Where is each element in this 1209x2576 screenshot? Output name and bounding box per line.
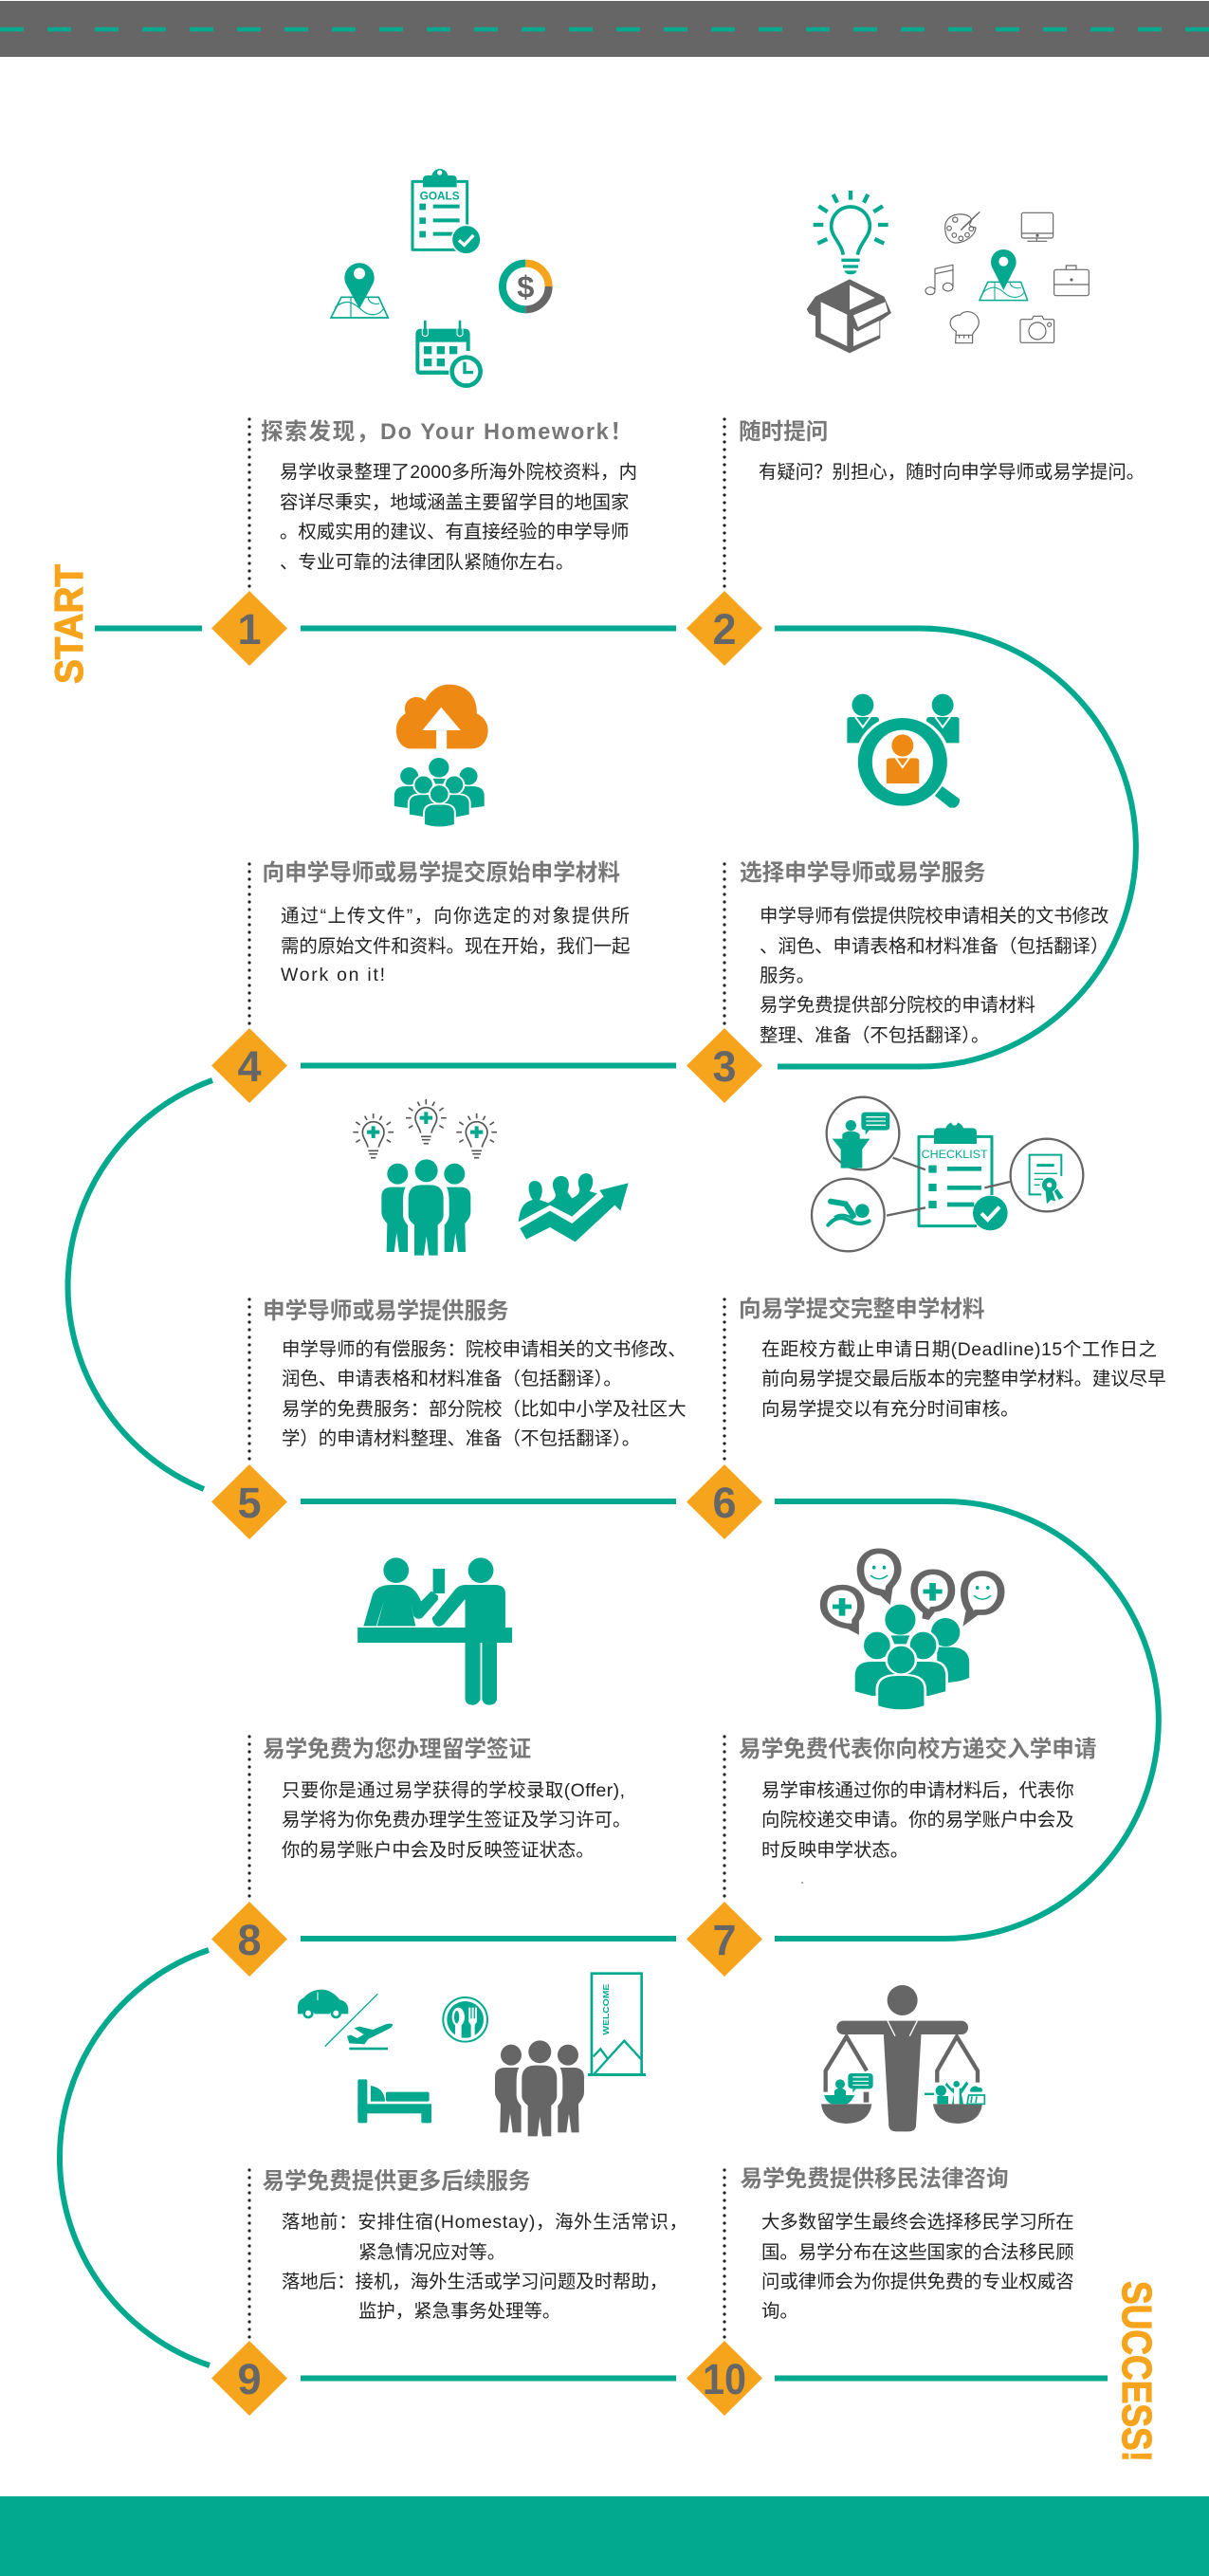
body: step 6 (761, 1339, 1166, 1420)
body: step 3: 易学免费提供部分院校的申请材料 (760, 995, 1035, 1016)
step marker 1 (211, 591, 287, 666)
body: step 9: 落地前：安排住宿(Homestay)，海外生活常识， (282, 2212, 687, 2233)
heading: step 4: 向申学导师或易学提交原始申学材料 (262, 859, 620, 886)
step marker 10: 10 (703, 2355, 746, 2403)
SUCCESS label: SUCCESS! (1113, 2281, 1160, 2462)
icon: crowd (853, 1605, 969, 1710)
body: step 10: 询。 (761, 2301, 798, 2322)
panel: step 2 text (724, 419, 1145, 590)
step marker 4: 4 (237, 1042, 262, 1091)
body: step 8: 你的易学账户中会及时反映签证状态。 (282, 1840, 595, 1861)
icon: monitor (1021, 212, 1053, 241)
panel: step 6 text (724, 1296, 1166, 1460)
icon: crowd of students (394, 758, 485, 827)
icon group: choose a mentor (847, 694, 960, 808)
icon: certificate circle (1011, 1139, 1083, 1211)
panel: step 10 text (724, 2166, 1074, 2340)
icon: person as scales (821, 1985, 982, 2131)
icon: upload cloud (396, 685, 488, 749)
body: step 3: 申学导师有偿提供院校申请相关的文书修改 (760, 906, 1108, 927)
step marker 1: 1 (237, 605, 262, 653)
bottom band (0, 2496, 1209, 2576)
body: step 9: 监护，紧急事务处理等。 (358, 2301, 560, 2322)
icon: map pin (331, 263, 388, 318)
step marker 7 (687, 1902, 762, 1977)
icon: welcome banner (588, 1974, 646, 2076)
step marker 5: 5 (237, 1479, 262, 1527)
icon: team of three (381, 1159, 470, 1256)
winding path (60, 628, 1159, 2379)
icon group: visa service (357, 1557, 512, 1705)
body: step 10: 大多数留学生最终会选择移民学习所在 (761, 2212, 1074, 2233)
body: step 3: 服务。 (760, 966, 815, 986)
icon: goals clipboard: GOALS (420, 190, 460, 203)
panel: step 5 text (249, 1298, 687, 1460)
panel: step 1 text (249, 419, 637, 590)
body: step 9 (282, 2212, 687, 2322)
body: step 5 (282, 1339, 687, 1449)
body: step 3: 整理、准备（不包括翻译）。 (760, 1025, 989, 1046)
icon group: submit application (824, 1551, 1001, 1710)
road banner (0, 1, 1209, 57)
icon: briefcase (1054, 266, 1089, 296)
step marker 4 (211, 1028, 287, 1103)
body: step 9: 紧急情况应对等。 (358, 2242, 505, 2263)
body: step 4: 通过“上传文件”，向你选定的对象提供所 (281, 906, 630, 927)
body: step 2: 有疑问？别担心，随时向申学导师或易学提问。 (759, 462, 1145, 483)
body: step 6: 向易学提交以有充分时间审核。 (761, 1399, 1018, 1420)
icon: magnifier with mentors (847, 694, 960, 808)
body: step 8 (282, 1780, 631, 1861)
body: step 4 (281, 906, 630, 985)
icon: three idea bulbs (353, 1099, 497, 1158)
step marker 5 (211, 1464, 287, 1539)
body: step 5: 申学导师的有偿服务：院校申请相关的文书修改、 (282, 1339, 687, 1360)
body: step 10 (761, 2212, 1074, 2322)
START label: START (46, 564, 91, 684)
body: step 4: 需的原始文件和资料。现在开始，我们一起 (281, 936, 630, 957)
icon: dining plate (443, 1997, 487, 2042)
icon: welcome banner: WELCOME (601, 1983, 611, 2035)
step marker 3 (687, 1028, 762, 1103)
panel: step 4 text (249, 859, 630, 1026)
body: step 1: 容详尽秉实，地域涵盖主要留学目的地国家 (280, 492, 629, 513)
body: step 1: 易学收录整理了2000多所海外院校资料，内 (280, 462, 637, 483)
icon: speaker circle (827, 1097, 899, 1169)
body: step 7: 易学审核通过你的申请材料后，代表你 (761, 1780, 1074, 1801)
icon group: idea bulb, box, interests (807, 191, 1089, 353)
icon group: legal advice scale (821, 1985, 984, 2131)
icon: checklist clipboard (919, 1119, 1008, 1230)
body: step 5: 学）的申请材料整理、准备（不包括翻译）。 (282, 1428, 640, 1449)
panel: step 9 text (249, 2168, 687, 2340)
icon: music note (925, 265, 953, 295)
step marker 6 (687, 1464, 762, 1539)
icon: feedback bubbles (824, 1551, 1001, 1629)
icon: bubble symbols (833, 1566, 991, 1616)
icon group: mentor service (353, 1099, 629, 1256)
heading: step 10: 易学免费提供移民法律咨询 (740, 2166, 1009, 2192)
icon: camera (1020, 316, 1054, 342)
icon: car and plane (298, 1990, 393, 2050)
icon: chef hat (950, 312, 979, 343)
body: step 5: 易学的免费服务：部分院校（比如中小学及社区大 (282, 1399, 687, 1420)
body: step 4: Work on it! (281, 965, 385, 985)
icon: budget ring: $ (517, 269, 534, 304)
icon: goals clipboard (412, 169, 481, 254)
step marker 6: 6 (712, 1479, 737, 1527)
panel: step 8 text (249, 1737, 631, 1900)
icon group: goals, map pin, budget, calendar (331, 169, 549, 386)
icon group: complete checklist (812, 1097, 1083, 1251)
icon: budget ring (503, 264, 549, 309)
heading: step 8: 易学免费为您办理留学签证 (263, 1737, 531, 1762)
icon: growth arrow with people (519, 1173, 629, 1242)
icon: scale contents (824, 2073, 984, 2104)
body: step 6: 前向易学提交最后版本的完整申学材料。建议尽早 (761, 1369, 1166, 1389)
heading: step 2: 随时提问 (739, 419, 828, 445)
body: step 1: 。权威实用的建议、有直接经验的申学导师 (280, 522, 629, 543)
body: step 3: 、润色、申请表格和材料准备（包括翻译） (760, 936, 1108, 957)
step marker 2 (687, 591, 762, 666)
heading: step 7: 易学免费代表你向校方递交入学申请 (739, 1736, 1096, 1762)
step marker 3: 3 (712, 1042, 737, 1091)
step marker 9 (211, 2341, 287, 2416)
icon: visa counter (357, 1557, 512, 1705)
body: step 7 (761, 1780, 1074, 1884)
body: step 5: 润色、申请表格和材料准备（包括翻译）。 (282, 1369, 622, 1389)
icon: calendar with clock (415, 322, 481, 386)
body: step 6: 在距校方截止申请日期(Deadline)15个工作日之 (761, 1339, 1157, 1360)
body: step 7: 向院校递交申请。你的易学账户中会及 (761, 1810, 1074, 1831)
heading: step 6: 向易学提交完整申学材料 (739, 1296, 985, 1322)
icon: bed (357, 2079, 431, 2123)
icon group: after-arrival services (298, 1974, 646, 2136)
panel: step 7 text (724, 1736, 1096, 1900)
heading: step 9: 易学免费提供更多后续服务 (262, 2168, 531, 2195)
icon: checklist clipboard: CHECKLIST (922, 1148, 988, 1161)
step marker 7: 7 (712, 1916, 737, 1964)
body: step 10: 问或律师会为你提供免费的专业权威咨 (761, 2272, 1074, 2292)
icon: swimmer circle (812, 1179, 885, 1251)
icon group: upload materials (394, 685, 488, 827)
step marker 8 (211, 1902, 287, 1977)
body: step 7: 时反映申学状态。 (761, 1840, 908, 1861)
step marker 9: 9 (237, 2355, 262, 2403)
icon: group of three (495, 2040, 584, 2136)
step marker 8: 8 (237, 1916, 262, 1964)
icon: palette (945, 212, 980, 243)
heading: step 3: 选择申学导师或易学服务 (740, 860, 986, 886)
heading: step 1: 探索发现，Do Your Homework！ (261, 419, 632, 445)
body: step 9: 落地后：接机，海外生活或学习问题及时帮助， (282, 2272, 668, 2292)
body: step 1: 、专业可靠的法律团队紧随你左右。 (280, 552, 574, 573)
icon: light bulb (814, 191, 888, 274)
body: step 1 (280, 462, 637, 573)
icon: open box (807, 279, 891, 353)
body: step 3 (760, 906, 1108, 1046)
heading: step 5: 申学导师或易学提供服务 (263, 1298, 509, 1324)
icon: map pin centre (980, 249, 1028, 301)
body: step 8: 只要你是通过易学获得的学校录取(Offer), (282, 1780, 625, 1801)
panel: step 3 text (724, 860, 1108, 1046)
step marker 2: 2 (712, 605, 737, 653)
step marker 10 (687, 2341, 762, 2416)
body: step 8: 易学将为你免费办理学生签证及学习许可。 (282, 1810, 631, 1831)
icon: connectors (887, 1158, 1010, 1216)
body: step 10: 国。易学分布在这些国家的合法移民顾 (761, 2242, 1074, 2263)
